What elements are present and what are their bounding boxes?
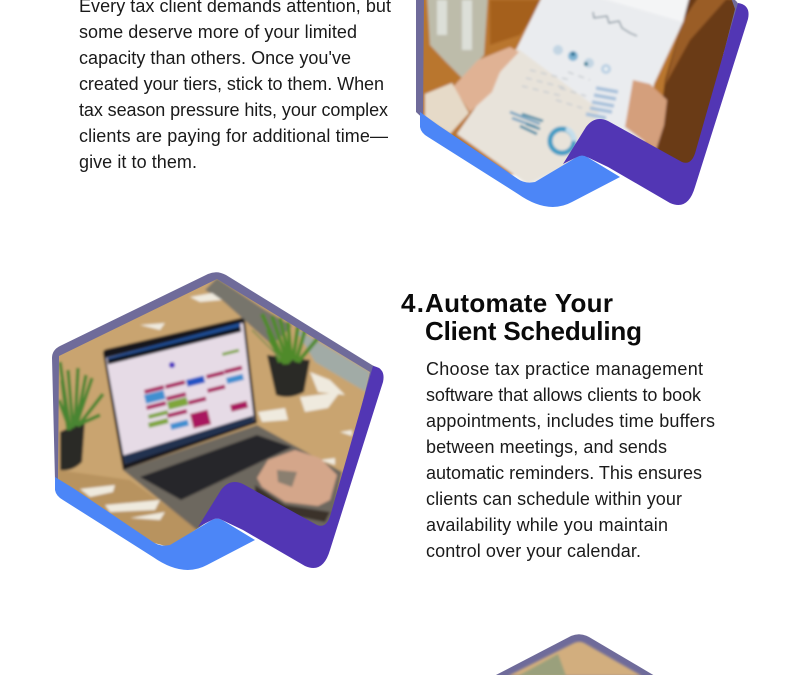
text block: scheduling advice: Choose tax practice management [426,359,703,379]
text block: scheduling advice: appointments, includes time buffers [426,411,715,431]
image panel: next step photo [494,634,655,675]
photo: desk surface [508,642,642,675]
text block: scheduling advice: software that allows clients to book [426,385,702,405]
left plant [59,362,103,470]
heading: step 4: Client Scheduling [425,316,642,346]
hexagon outline [416,0,745,170]
photo: hands holding report [420,0,740,190]
text block: scheduling advice: control over your calendar. [426,541,641,561]
hand on trackpad [255,485,330,522]
text block: tier advice: some deserve more of your limited [79,22,357,42]
right plant [252,314,318,397]
blue ribbon [420,112,620,207]
purple ribbon [198,366,384,568]
hexagon outline [52,272,378,540]
blue ribbon [55,477,255,570]
purple ribbon [563,3,749,205]
heading: step 4: Automate Your [425,288,613,318]
photo: laptop on wooden desk [58,279,370,546]
image panel: report on desk [416,0,749,207]
text block: scheduling advice: clients can schedule within your [426,489,682,509]
heading: step 4: 4. [401,288,424,318]
text block: tier advice: created your tiers, stick to them. When [79,74,384,94]
text block: tier advice: clients are paying for additional time— [79,126,388,146]
image panel: laptop calendar [50,270,384,570]
text block: tier advice [79,0,391,172]
heading: step 4 [401,288,642,346]
text block: tier advice: give it to them. [79,152,197,172]
laptop base [123,425,342,530]
text block: scheduling advice [426,359,715,561]
text block: scheduling advice: availability while you maintain [426,515,668,535]
text block: scheduling advice: between meetings, and sends [426,437,667,457]
text block: tier advice: tax season pressure hits, your complex [79,100,388,120]
laptop screen [103,318,257,470]
text block: scheduling advice: automatic reminders. This ensures [426,463,702,483]
text block: tier advice: capacity than others. Once you've [79,48,351,68]
hexagon outline [494,634,655,675]
